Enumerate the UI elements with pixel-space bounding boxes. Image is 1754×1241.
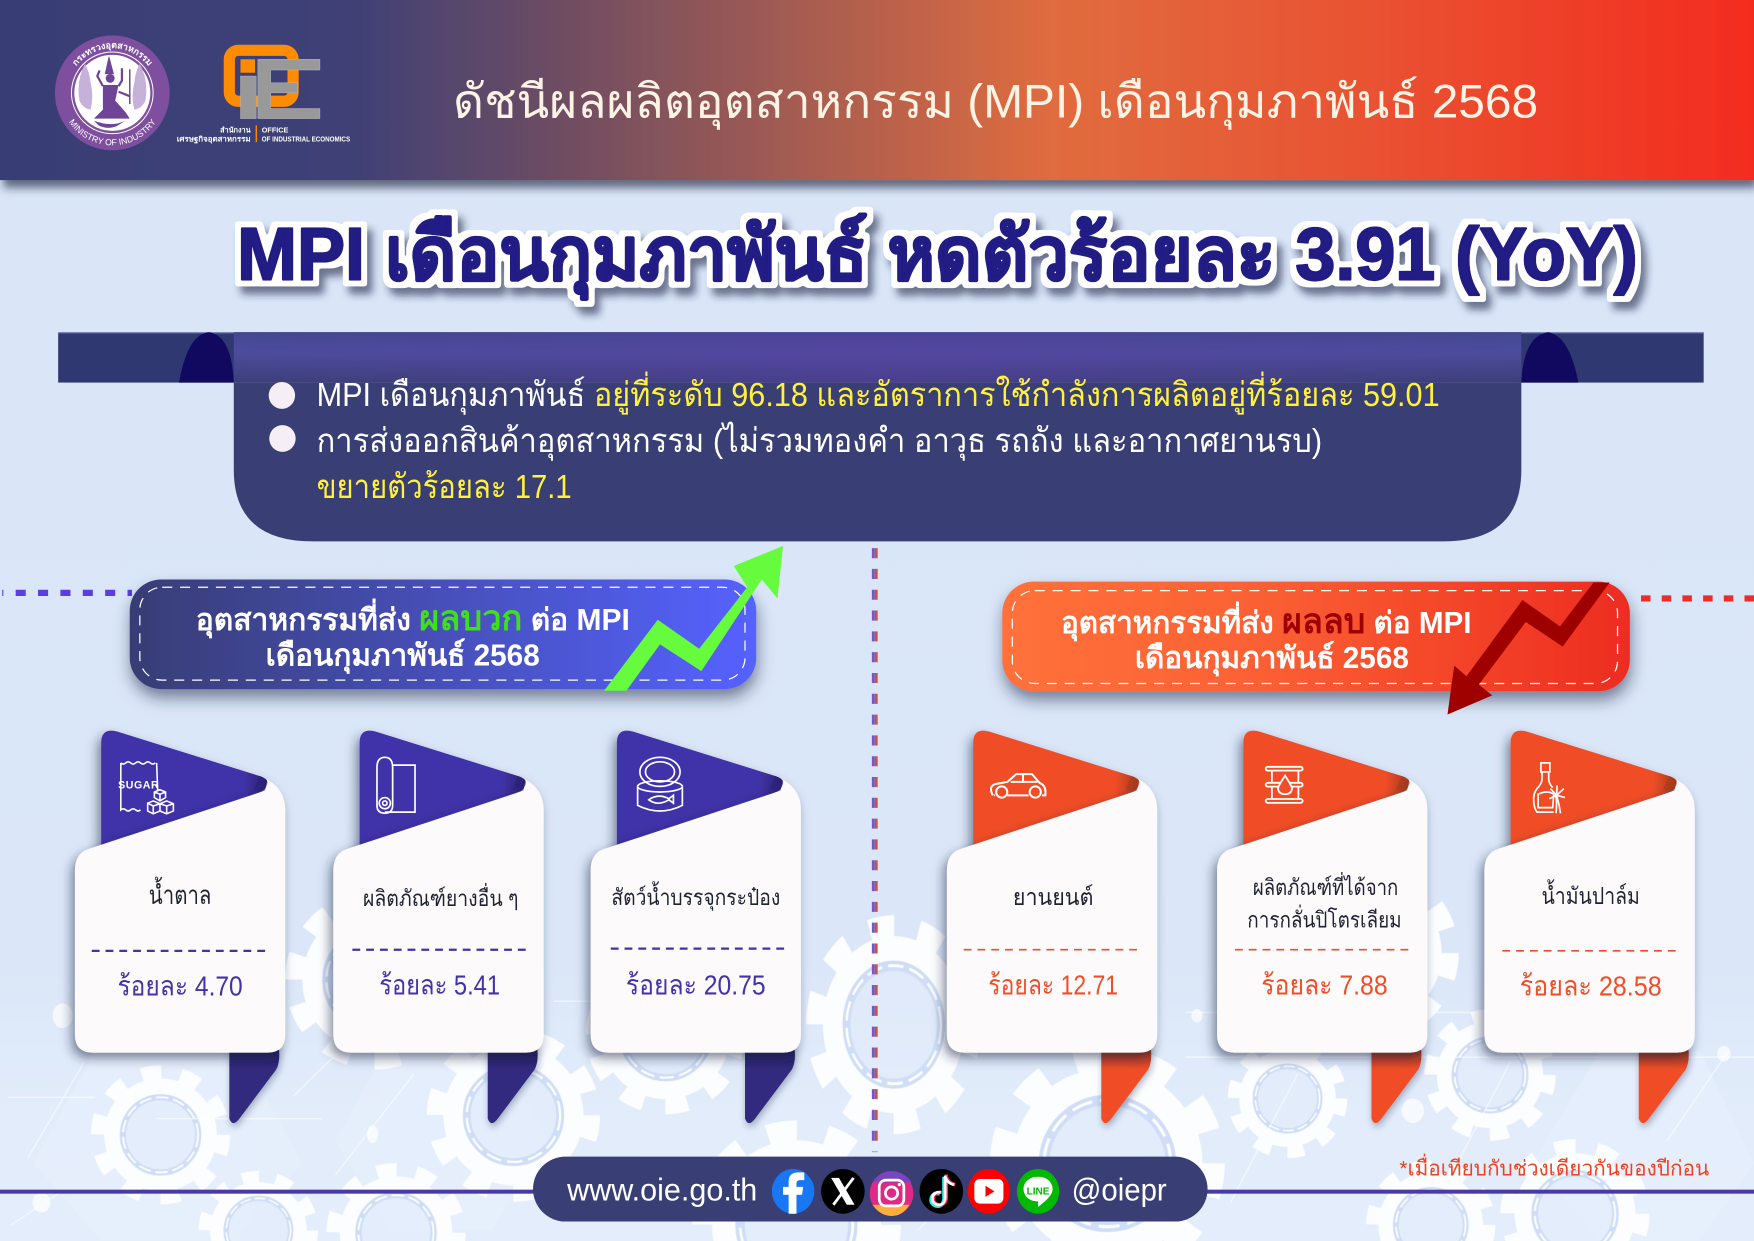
value: ร้อยละ 4.70 — [117, 971, 243, 1002]
logo: office of industrial economics: OF INDUSTRIAL ECONOMICS — [262, 135, 350, 144]
card: automobiles — [947, 731, 1157, 1123]
icon: line — [1017, 1169, 1059, 1214]
bullet points: MPI เดือนกุมภาพันธ์ อยู่ที่ระดับ 96.18 และอัตราการใช้กำลังการผลิตอยู่ที่ร้อยละ 59.01 — [317, 371, 1440, 415]
value: ร้อยละ 20.75 — [626, 969, 766, 1000]
bullet points: การส่งออกสินค้าอุตสาหกรรม (ไม่รวมทองคำ อาวุธ รถถัง และอากาศยานรบ) — [317, 421, 1322, 461]
logo: office of industrial economics: เศรษฐกิจอุตสาหกรรม — [177, 135, 251, 145]
icon: oil bottle and palm — [1534, 763, 1565, 813]
icon: tiktok — [920, 1169, 963, 1214]
label: น้ำตาล — [149, 877, 211, 910]
value: ร้อยละ 7.88 — [1261, 969, 1388, 1000]
icon: fish can — [638, 757, 682, 811]
label: ผลิตภัณฑ์ที่ได้จาก — [1253, 872, 1398, 900]
icon: red down arrow — [1447, 582, 1610, 714]
icon: green up arrow — [604, 546, 783, 691]
label: น้ำมันปาล์ม — [1541, 879, 1640, 909]
footer contact pill — [533, 1157, 1208, 1222]
card: refined petroleum — [1217, 731, 1427, 1123]
bullet points: ขยายตัวร้อยละ 17.1 — [317, 469, 572, 506]
icon: car — [991, 774, 1046, 798]
right dotted connector — [1641, 596, 1754, 601]
logo: ministry of industry: กระทรวงอุตสาหกรรม — [73, 42, 152, 66]
label: ยานยนต์ — [1013, 884, 1093, 910]
card: other rubber products — [333, 731, 544, 1123]
footnote: *เมื่อเทียบกับช่วงเดียวกันของปีก่อน — [1399, 1154, 1709, 1181]
footer contact pill: @oiepr — [1072, 1172, 1167, 1207]
logo: ministry of industry: MINISTRY OF INDUSTRY — [69, 118, 155, 146]
logo: office of industrial economics — [177, 50, 350, 145]
label: สัตว์น้ำบรรจุกระป๋อง — [611, 881, 780, 911]
logo: ministry of industry — [54, 36, 170, 150]
footer rule — [0, 1190, 1754, 1194]
summary ribbon panel — [58, 332, 1704, 541]
label: ผลิตภัณฑ์ยางอื่น ๆ — [363, 883, 518, 911]
icon: youtube — [968, 1169, 1010, 1214]
card: canned seafood — [591, 731, 801, 1123]
value: ร้อยละ 5.41 — [379, 969, 500, 1000]
logo: office of industrial economics: สำนักงาน — [220, 126, 251, 135]
header title: ดัชนีผลผลิตอุตสาหกรรม (MPI) เดือนกุมภาพันธ์ 2568 — [453, 74, 1538, 130]
center divider — [873, 548, 876, 1152]
icon: line: LINE — [1027, 1187, 1050, 1198]
card: sugar — [75, 731, 285, 1123]
label — [1247, 872, 1402, 932]
icon: instagram — [870, 1171, 913, 1216]
negative badge: อุตสาหกรรมที่ส่ง ผลลบ ต่อ MPI — [1061, 601, 1472, 642]
value: ร้อยละ 12.71 — [988, 969, 1118, 1000]
label: การกลั่นปิโตรเลียม — [1247, 904, 1402, 932]
value: ร้อยละ 28.58 — [1520, 971, 1662, 1002]
icon: rubber roll — [377, 757, 415, 813]
card: palm oil — [1484, 731, 1695, 1123]
bullet points — [269, 371, 1440, 506]
positive badge — [130, 546, 783, 691]
icon: oil barrel — [1266, 767, 1303, 803]
header bar — [0, 0, 1754, 195]
footer contact pill: www.oie.go.th — [566, 1172, 757, 1207]
negative badge: เดือนกุมภาพันธ์ 2568 — [1135, 640, 1409, 677]
logo: office of industrial economics: OFFICE — [262, 126, 289, 135]
icon: sugar bag: SUGAR — [118, 780, 159, 792]
icon: x — [821, 1169, 865, 1214]
icon: sugar bag — [118, 762, 173, 814]
positive badge: เดือนกุมภาพันธ์ 2568 — [266, 638, 540, 675]
positive badge: อุตสาหกรรมที่ส่ง ผลบวก ต่อ MPI — [196, 598, 630, 639]
main title: MPI เดือนกุมภาพันธ์ หดตัวร้อยละ 3.91 (YoY) — [237, 213, 1638, 301]
icon: facebook — [772, 1169, 814, 1214]
negative badge — [1002, 582, 1630, 714]
left dotted connector — [2, 590, 132, 596]
